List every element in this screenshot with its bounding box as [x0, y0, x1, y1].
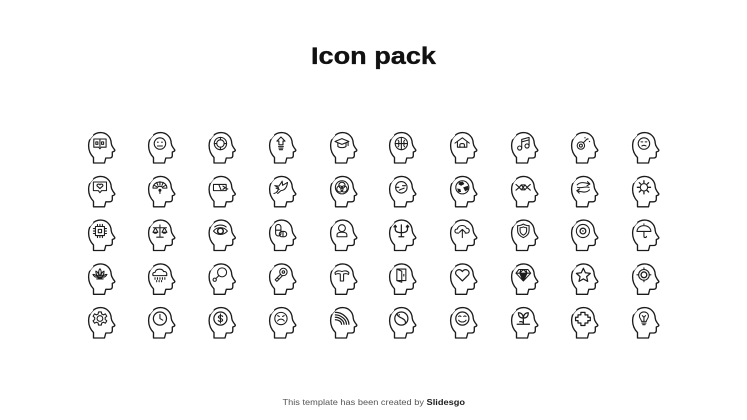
- icon: head with face: [633, 133, 659, 163]
- icon: head with brain: [390, 133, 416, 163]
- icon: head with pills: [270, 220, 296, 250]
- icon: head with music note: [512, 133, 538, 163]
- icon: head with crosshair: [633, 264, 659, 294]
- icon: head with three circles: [331, 176, 357, 207]
- icon: head with puzzle badge: [572, 308, 598, 338]
- icon: head with microchip: [89, 220, 115, 250]
- icon: head with gear: [89, 308, 115, 338]
- panel: icon grid: [89, 133, 659, 338]
- icon: head with bird: [270, 176, 296, 207]
- icon: head with T shape: [331, 264, 357, 294]
- icon: head with smile: [451, 308, 477, 338]
- icon: head with graduation cap: [331, 133, 357, 163]
- icon: head with magnifier: [209, 264, 235, 294]
- icon: head with exchange arrows: [572, 176, 598, 207]
- icon: head with light bulb: [633, 308, 659, 338]
- icon: head with linked crosses: [512, 176, 538, 207]
- icon: head with yin yang: [390, 308, 416, 338]
- icon: head with dollar coin: [209, 308, 235, 338]
- icon: head with clock: [149, 308, 175, 338]
- icon: head with thinking face: [390, 176, 416, 207]
- icon: head with target: [572, 220, 598, 250]
- icon: head with sprout: [512, 308, 538, 338]
- icon: head with door: [390, 264, 416, 294]
- icon: head with rain cloud: [149, 264, 175, 294]
- icon: head with star: [572, 264, 598, 294]
- icon: head with diamond: [512, 264, 538, 294]
- icon: head with scales: [149, 220, 175, 250]
- icon: head with quote book: [89, 133, 115, 163]
- icon: head with planet: [572, 133, 598, 163]
- icon: head with bulb and up arrow: [270, 133, 296, 163]
- icon: head with rainbow: [331, 308, 357, 338]
- icon: head with shield: [512, 220, 538, 250]
- icon: head with eye: [209, 220, 235, 250]
- icon: head with sun: [633, 176, 659, 207]
- icon: head with lotus: [89, 264, 115, 294]
- icon: head with battery: [209, 176, 235, 207]
- icon: head with sad face: [270, 308, 296, 338]
- icon: head with key: [270, 264, 296, 294]
- footer credit: This template has been created by Slidesgo: [282, 397, 465, 407]
- icon: head with heart bubble: [89, 176, 115, 207]
- icon: head with cloud upload: [451, 220, 477, 250]
- icon: head with neutral face: [149, 133, 175, 163]
- icon: head with umbrella: [633, 220, 659, 250]
- icon: head with user: [331, 220, 357, 250]
- icon: head with ring: [209, 133, 235, 163]
- icon: head with globe: [451, 176, 477, 207]
- icon: head with psi symbol: [390, 220, 416, 250]
- icon: head with heart: [451, 264, 477, 294]
- icon: head with house on cloud: [451, 133, 477, 163]
- icon: head with gauge dome: [149, 176, 175, 207]
- title: Icon pack: [311, 43, 436, 70]
